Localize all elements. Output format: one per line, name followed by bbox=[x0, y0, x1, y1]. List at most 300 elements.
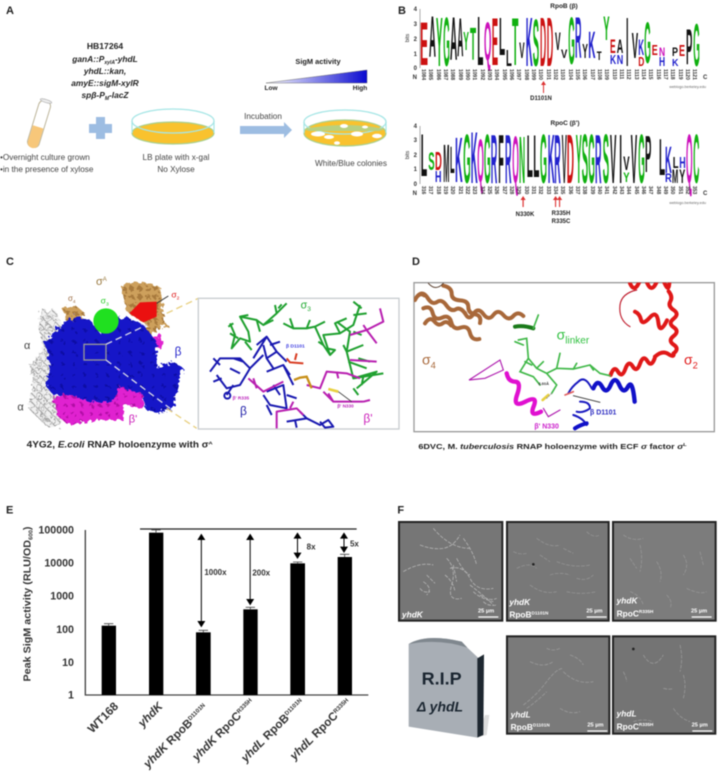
position numbers RpoC: 325 bbox=[486, 186, 492, 195]
sequence logo RpoB letters: G bbox=[644, 10, 651, 76]
position numbers RpoC: 335 bbox=[559, 186, 565, 195]
micrograph yhdL RpoC: RpoC bbox=[617, 721, 639, 731]
culture caption: •in the presence of xylose bbox=[0, 165, 94, 174]
logo axis RpoC: 2 bbox=[414, 153, 418, 159]
sigma4 brown ribbons bbox=[415, 286, 523, 339]
y axis ticks: 100 bbox=[56, 624, 74, 636]
weblogo credit RpoC: weblogo.berkeley.edu bbox=[669, 201, 706, 205]
culture caption: •Overnight culture grown bbox=[0, 153, 90, 162]
panel D: M. tuberculosis holoenzyme structure bbox=[412, 256, 714, 451]
inset labels: 3 bbox=[307, 306, 311, 313]
sequence logo RpoC letters: K bbox=[471, 118, 478, 200]
position numbers RpoB: 1110 bbox=[611, 69, 617, 80]
sequence logo RpoC letters: Y bbox=[623, 169, 630, 186]
position numbers RpoC: 329 bbox=[515, 186, 521, 195]
position numbers RpoC: 326 bbox=[493, 186, 499, 195]
structure labels: 3 bbox=[106, 301, 109, 307]
sequence logo RpoB letters: I bbox=[626, 3, 629, 81]
sequence logo RpoC letters: D bbox=[567, 120, 574, 198]
x axis labels: yhdL RpoB bbox=[239, 712, 292, 765]
x axis labels: yhdK RpoC bbox=[190, 709, 244, 764]
sequence logo RpoC letters: M bbox=[672, 167, 678, 188]
x axis labels: D1101N bbox=[284, 698, 304, 717]
sequence logo RpoB letters: V bbox=[561, 48, 568, 61]
y axis ticks: 1 bbox=[68, 690, 74, 702]
logo axis RpoB: 1 bbox=[414, 52, 418, 58]
sequence logo RpoC letters: Y bbox=[576, 120, 582, 198]
logo axis RpoC: 4 bbox=[414, 124, 418, 130]
sequence logo RpoC letters: G bbox=[540, 120, 547, 198]
inset: active site sticks bbox=[198, 298, 399, 429]
strain genotype text: amyE::sigM-xylR bbox=[71, 78, 139, 88]
micrograph yhdK RpoC bbox=[613, 522, 716, 621]
strain genotype text: -lacZ bbox=[109, 90, 129, 100]
fold change labels: 8x bbox=[307, 543, 316, 552]
bars bbox=[102, 533, 352, 695]
micrograph yhdK: yhdK bbox=[401, 610, 424, 620]
logo axis RpoC: 0 bbox=[414, 182, 418, 188]
sequence logo RpoC letters: G bbox=[463, 120, 471, 198]
caption D: 6DVC, M. tuberculosis RNAP holoenzyme with ECF σ factor σ bbox=[418, 442, 682, 451]
position numbers RpoB bbox=[420, 69, 697, 80]
micrograph yhdL RpoB bbox=[507, 636, 609, 734]
logo axis RpoB: 4 bbox=[414, 7, 418, 13]
logo axis RpoB: 3 bbox=[414, 22, 418, 28]
micrograph yhdL RpoB: RpoB bbox=[511, 722, 533, 732]
structure labels: A bbox=[103, 277, 107, 283]
position numbers RpoC: 339 bbox=[589, 186, 595, 195]
pointer bbox=[573, 396, 600, 402]
position numbers RpoC: 332 bbox=[537, 186, 543, 195]
SigM activity gradient legend: Low bbox=[264, 85, 278, 92]
position numbers RpoB: 1106 bbox=[581, 69, 587, 80]
ribbon structure bbox=[415, 279, 677, 428]
position numbers RpoC: 346 bbox=[640, 186, 646, 195]
surface model of RNAP bbox=[28, 282, 198, 428]
sequence logo RpoB letters: D bbox=[547, 3, 553, 81]
sequence logo RpoB letters: D bbox=[540, 3, 546, 81]
inset labels bbox=[233, 299, 373, 425]
sequence logo RpoC letters: M bbox=[443, 134, 450, 195]
structure labels D bbox=[422, 326, 698, 430]
logo axis RpoC bbox=[405, 124, 708, 197]
weblogo credit RpoB: weblogo.berkeley.edu bbox=[669, 85, 706, 89]
position numbers RpoB: 1088 bbox=[449, 69, 455, 80]
structure labels D: σ bbox=[684, 351, 693, 367]
mutation labels RpoC: R335C bbox=[552, 219, 571, 225]
yellow residue bbox=[328, 389, 338, 392]
sequence logo RpoB letters: E bbox=[610, 38, 616, 58]
position numbers RpoB: 1093 bbox=[486, 69, 492, 80]
sigma3 green surface bbox=[93, 308, 119, 334]
structure labels bbox=[17, 276, 182, 426]
strain genotype text: HB17264 bbox=[87, 41, 123, 51]
sequence logo RpoC letters: P bbox=[645, 125, 651, 183]
y axis ticks: 100000 bbox=[38, 525, 74, 537]
sequence logo RpoB letters: L bbox=[506, 45, 512, 71]
sequence logo RpoB letters: N bbox=[659, 47, 665, 59]
position numbers RpoC bbox=[420, 186, 697, 195]
position numbers RpoC: 317 bbox=[427, 186, 433, 195]
structure labels D: β D1101 bbox=[590, 409, 617, 416]
sequence logo RpoB letters: G bbox=[693, 13, 700, 80]
inset labels: β D1101 bbox=[286, 343, 305, 349]
sequence logo RpoC letters: L bbox=[421, 123, 427, 190]
caption C: 4YG2, E.coli RNAP holoenzyme with σ bbox=[27, 440, 194, 450]
strain genotype text: yhdL::kan, bbox=[83, 66, 126, 76]
sequence logo RpoB letters: G bbox=[568, 5, 575, 79]
position numbers RpoC: 330 bbox=[523, 186, 529, 195]
sequence logo RpoC letters: Q bbox=[686, 120, 693, 198]
strain genotype text bbox=[71, 41, 139, 102]
position numbers RpoB: 1087 bbox=[442, 69, 448, 80]
position numbers RpoC: 341 bbox=[603, 186, 609, 195]
position numbers RpoB: 1120 bbox=[684, 69, 690, 80]
structure labels: α bbox=[17, 402, 24, 414]
structure frame bbox=[414, 283, 714, 432]
structure labels D: 2 bbox=[693, 360, 698, 370]
sequence logo RpoC letters: N bbox=[519, 124, 525, 198]
alpha subunits surface bbox=[28, 310, 62, 427]
sequence logo RpoB letters: E bbox=[420, 11, 428, 79]
sequence logo RpoC letters: L bbox=[673, 153, 678, 172]
micrograph yhdL RpoC: R335H bbox=[639, 722, 654, 727]
inset labels: σ bbox=[301, 299, 307, 311]
position numbers RpoC: 345 bbox=[633, 186, 639, 195]
micrograph yhdL RpoB: yhdL bbox=[510, 710, 531, 720]
sequence logo RpoB letters: A bbox=[617, 38, 623, 58]
SigM activity gradient legend: SigM activity bbox=[295, 57, 341, 66]
blue helix bbox=[593, 380, 635, 402]
position numbers RpoC: 324 bbox=[479, 186, 485, 195]
sequence logo RpoB letters: S bbox=[533, 7, 539, 81]
logo title RpoB: RpoB (β) bbox=[550, 3, 578, 10]
logo axis RpoB bbox=[405, 7, 708, 81]
fold change labels: 1000x bbox=[204, 568, 227, 577]
sequence logo RpoC letters: R bbox=[491, 120, 497, 198]
red residue sticks bbox=[287, 353, 303, 363]
sequence logo RpoB letters: L bbox=[477, 2, 483, 80]
inset labels: β bbox=[240, 404, 247, 418]
icon: gravestone R.I.P yhdL bbox=[409, 638, 489, 738]
colonies caption: White/Blue colonies bbox=[315, 159, 387, 168]
sigma2 red surface bbox=[129, 302, 157, 322]
position numbers RpoB: 1104 bbox=[567, 69, 573, 80]
sequence logo RpoC letters: L bbox=[527, 124, 533, 191]
strain genotype text: xylA bbox=[103, 60, 115, 66]
structure labels: β' bbox=[129, 414, 137, 426]
sequence logo RpoB letters: D bbox=[638, 55, 644, 70]
sequence logo RpoB letters: Y bbox=[436, 3, 443, 81]
mutation labels RpoC: R335H bbox=[552, 211, 570, 217]
micrograph yhdK RpoC: RpoC bbox=[617, 608, 639, 618]
sequence logo RpoC letters: L bbox=[659, 128, 665, 186]
culture caption bbox=[0, 153, 94, 174]
logo title RpoC: RpoC (β') bbox=[551, 120, 579, 127]
strain genotype text: spβ-P bbox=[81, 90, 105, 100]
position numbers RpoB: 1105 bbox=[574, 69, 580, 80]
micrograph yhdK RpoB: RpoB bbox=[509, 610, 532, 620]
position numbers RpoB: 1097 bbox=[515, 69, 521, 80]
position numbers RpoC: 352 bbox=[684, 186, 690, 195]
sequence logo RpoC letters: C bbox=[693, 120, 699, 198]
panel F: microscopy images bbox=[397, 504, 716, 738]
sequence logo RpoC letters: S bbox=[428, 149, 435, 177]
icon: gravestone R.I.P yhdL: R.I.P bbox=[422, 668, 462, 688]
structure labels D: σ bbox=[557, 326, 565, 342]
position numbers RpoB: 1098 bbox=[523, 69, 529, 80]
sequence logo RpoC letters: R bbox=[595, 120, 601, 198]
micrograph yhdK RpoB: yhdK bbox=[508, 597, 531, 607]
sequence logo RpoC letters: L bbox=[533, 124, 539, 191]
logo axis RpoB: C bbox=[703, 75, 708, 81]
sequence logo RpoB letters: P bbox=[686, 18, 692, 75]
position numbers RpoB: 1112 bbox=[625, 69, 631, 80]
position numbers RpoB: 1118 bbox=[669, 69, 675, 80]
plate caption bbox=[143, 153, 210, 174]
structure labels D: σ bbox=[422, 351, 431, 367]
position numbers RpoB: 1119 bbox=[677, 69, 683, 80]
mutation label D1101N: D1101N bbox=[530, 96, 552, 102]
strain genotype text: ganA::P bbox=[72, 54, 104, 64]
sequence logo RpoB letters: N bbox=[617, 54, 623, 67]
structure labels D: linker bbox=[565, 335, 590, 346]
sequence logo RpoB letters: A bbox=[429, 4, 436, 70]
panel label D: D bbox=[412, 256, 420, 268]
sequence logo RpoC letters: V bbox=[623, 154, 630, 175]
blue lower helix bbox=[575, 423, 587, 428]
sequence logo RpoB letters: V bbox=[632, 25, 638, 66]
fold change labels: 200x bbox=[252, 569, 271, 578]
structure labels: β bbox=[175, 345, 182, 359]
position numbers RpoC: 322 bbox=[464, 186, 470, 195]
SigM activity gradient legend: High bbox=[353, 85, 367, 92]
y axis ticks: 1000 bbox=[50, 591, 74, 603]
sequence logo RpoB letters: K bbox=[610, 53, 616, 68]
micrograph yhdL RpoB: D1101N bbox=[533, 723, 550, 728]
sequence logo RpoB letters: G bbox=[443, 3, 450, 81]
sequence logo RpoB letters: A bbox=[457, 7, 463, 69]
panel label C: C bbox=[6, 256, 14, 268]
x axis labels: yhdL RpoC bbox=[287, 709, 341, 763]
position numbers RpoC: 333 bbox=[545, 186, 551, 195]
panel label B: B bbox=[398, 5, 406, 17]
position numbers RpoB: 1108 bbox=[596, 69, 602, 80]
magenta helix bbox=[507, 373, 541, 414]
structure labels: σ bbox=[96, 276, 103, 288]
fold change labels bbox=[204, 539, 359, 578]
logo axis RpoC: 3 bbox=[414, 138, 418, 144]
position numbers RpoB: 1100 bbox=[537, 69, 543, 80]
x axis labels: yhdK bbox=[135, 699, 167, 730]
sequence logo RpoB letters: R bbox=[575, 5, 582, 71]
micrograph yhdK RpoC: 25 µm bbox=[691, 609, 707, 615]
green linker sticks bbox=[515, 315, 610, 393]
sequence logo RpoB letters: A bbox=[450, 6, 457, 74]
micrograph yhdL RpoB: 25 µm bbox=[587, 723, 603, 729]
panel A: screening workflow bbox=[0, 5, 387, 174]
logo axis RpoB: 0 bbox=[414, 66, 418, 72]
position numbers RpoB: 1094 bbox=[493, 69, 499, 80]
position numbers RpoC: 350 bbox=[669, 186, 675, 195]
plate caption: No Xylose bbox=[157, 165, 195, 174]
position numbers RpoC: 320 bbox=[449, 186, 455, 195]
x axis labels: yhdK RpoB bbox=[141, 717, 195, 771]
magenta thin loop bbox=[469, 360, 560, 417]
sequence logo RpoC letters: F bbox=[498, 120, 504, 198]
logo axis RpoC: 1 bbox=[414, 167, 418, 173]
x axis labels: R335H bbox=[333, 698, 350, 715]
zoom lines bbox=[106, 298, 198, 428]
structure labels: σ bbox=[171, 289, 177, 299]
position numbers RpoB: 1085 bbox=[427, 69, 433, 80]
sequence logo RpoB letters: Y bbox=[603, 10, 610, 48]
sequence logo RpoC letters: R bbox=[665, 172, 672, 185]
sequence logo RpoC letters: K bbox=[665, 139, 672, 181]
logo axis RpoC: C bbox=[703, 191, 708, 197]
icon: plus sign bbox=[89, 117, 112, 139]
sequence logo RpoC letters: Y bbox=[679, 168, 685, 188]
sequence logo RpoC letters: Q bbox=[512, 124, 519, 198]
position numbers RpoC: 316 bbox=[420, 186, 426, 195]
position numbers RpoB: 1107 bbox=[589, 69, 595, 80]
inset labels: β' bbox=[363, 411, 373, 425]
sequence logo RpoC letters: D bbox=[435, 147, 442, 177]
micrograph yhdK RpoB: 25 µm bbox=[586, 609, 602, 615]
sequence logo RpoB letters: L bbox=[499, 8, 505, 68]
sequence logo RpoC letters: H bbox=[435, 167, 442, 186]
sequence logo RpoC letters: S bbox=[603, 120, 609, 198]
structure labels: α bbox=[24, 340, 31, 352]
position numbers RpoC: 353 bbox=[691, 186, 697, 195]
icon: gravestone R.I.P yhdL: Δ yhdL bbox=[416, 699, 463, 715]
sequence logo RpoB letters: Y bbox=[463, 27, 469, 57]
icon: agar plate bbox=[132, 109, 214, 144]
arrow: D1101N bbox=[541, 81, 546, 93]
sequence logo RpoC letters: L bbox=[450, 138, 455, 181]
position numbers RpoB: 1114 bbox=[640, 69, 646, 80]
sequence logo RpoC letters: V bbox=[631, 120, 637, 198]
yellow residue bbox=[543, 395, 548, 400]
sequence logo RpoB letters: V bbox=[555, 27, 561, 55]
position numbers RpoC: 340 bbox=[596, 186, 602, 195]
panel E: SigM activity bar chart bbox=[6, 504, 368, 771]
position numbers RpoB: 1102 bbox=[552, 69, 558, 80]
dark green linker start bbox=[515, 326, 533, 328]
position numbers RpoC: 351 bbox=[677, 186, 683, 195]
blue sticks bbox=[210, 337, 333, 428]
sequence logo RpoB letters: H bbox=[659, 55, 665, 70]
position numbers RpoC: 321 bbox=[457, 186, 463, 195]
position numbers RpoB: 1109 bbox=[603, 69, 609, 80]
blue thin loop bbox=[568, 379, 592, 425]
panel label A: A bbox=[6, 5, 14, 17]
logo axis RpoB: N bbox=[413, 75, 417, 81]
position numbers RpoB: 1103 bbox=[559, 69, 565, 80]
position numbers RpoC: 349 bbox=[662, 186, 668, 195]
sigma2 red ribbons bbox=[611, 279, 677, 375]
micrograph yhdL RpoC: yhdL bbox=[616, 709, 637, 719]
reference line bbox=[140, 527, 357, 531]
position numbers RpoB: 1090 bbox=[464, 69, 470, 80]
inset labels: β' R335 bbox=[233, 395, 249, 400]
position numbers RpoB: 1101 bbox=[545, 69, 551, 80]
position numbers RpoC: 343 bbox=[618, 186, 624, 195]
sequence logo RpoC letters: G bbox=[588, 120, 595, 198]
position numbers RpoB: 1096 bbox=[508, 69, 514, 80]
y axis ticks bbox=[38, 525, 74, 702]
position numbers RpoB: 1115 bbox=[647, 69, 653, 80]
error bars bbox=[104, 530, 349, 632]
strain genotype text: M bbox=[105, 96, 110, 102]
position numbers RpoC: 323 bbox=[471, 186, 477, 195]
sequence logo RpoB letters: P bbox=[672, 46, 678, 59]
micrograph yhdK RpoB: D1101N bbox=[532, 610, 549, 615]
y axis title: 600 bbox=[28, 530, 34, 540]
fold change arrows bbox=[197, 532, 348, 627]
sequence logo RpoC letters: H bbox=[679, 153, 686, 172]
position numbers RpoB: 1089 bbox=[457, 69, 463, 80]
position numbers RpoB: 1092 bbox=[479, 69, 485, 80]
position numbers RpoC: 338 bbox=[581, 186, 587, 195]
position numbers RpoB: 1116 bbox=[655, 69, 661, 80]
zoom box bbox=[84, 344, 106, 360]
micrograph yhdK: 25 µm bbox=[478, 609, 494, 615]
SigM activity gradient legend bbox=[264, 57, 367, 92]
green sticks bbox=[228, 302, 383, 395]
sequence logo RpoB letters: Y bbox=[582, 41, 588, 63]
position numbers RpoB: 1084 bbox=[420, 69, 426, 80]
beta surface bbox=[45, 316, 183, 413]
logo axis RpoB: bits bbox=[405, 33, 411, 42]
structure labels D: 4 bbox=[431, 360, 436, 370]
sequence logo RpoB letters: K bbox=[672, 58, 679, 69]
sequence logo RpoB letters: T bbox=[470, 20, 476, 71]
sequence logo RpoC letters: S bbox=[582, 120, 588, 198]
panel label F: F bbox=[397, 504, 404, 516]
icon: plate with colonies bbox=[304, 110, 386, 146]
micrograph yhdK RpoC: R335H bbox=[639, 609, 654, 614]
mutation labels RpoC: N330K bbox=[516, 212, 535, 218]
logo axis RpoC: N bbox=[413, 191, 417, 197]
axes bbox=[85, 530, 368, 695]
sequence logo RpoC letters: G bbox=[638, 120, 645, 198]
logo axis RpoC: bits bbox=[405, 150, 411, 159]
position numbers RpoC: 334 bbox=[552, 186, 558, 195]
micrograph yhdK RpoC: yhdK bbox=[616, 596, 638, 606]
micrograph yhdK bbox=[399, 522, 502, 621]
sequence logo RpoB letters: T bbox=[597, 51, 602, 64]
micrograph yhdL RpoC bbox=[613, 636, 715, 734]
inset labels: β' N330 bbox=[337, 403, 354, 408]
sequence logo RpoB letters bbox=[420, 2, 700, 81]
position numbers RpoB: 1099 bbox=[530, 69, 536, 80]
sequence logo RpoB letters: E bbox=[652, 42, 658, 59]
sequence logo RpoB letters: V bbox=[519, 38, 525, 63]
mutation labels RpoC bbox=[516, 211, 571, 225]
position numbers RpoB: 1121 bbox=[691, 69, 697, 80]
panel B: sequence logos bbox=[398, 2, 708, 225]
y axis title: ) bbox=[23, 526, 34, 530]
sequence logo RpoC letters: R bbox=[554, 120, 561, 198]
beta prime upper surface bbox=[150, 333, 163, 349]
icon: test tube bbox=[26, 98, 52, 150]
position numbers RpoC: 342 bbox=[611, 186, 617, 195]
fold change labels: 5x bbox=[350, 539, 359, 548]
beta prime surface bbox=[53, 385, 143, 425]
position numbers RpoC: 319 bbox=[442, 186, 448, 195]
micrograph yhdK RpoB bbox=[507, 522, 609, 621]
